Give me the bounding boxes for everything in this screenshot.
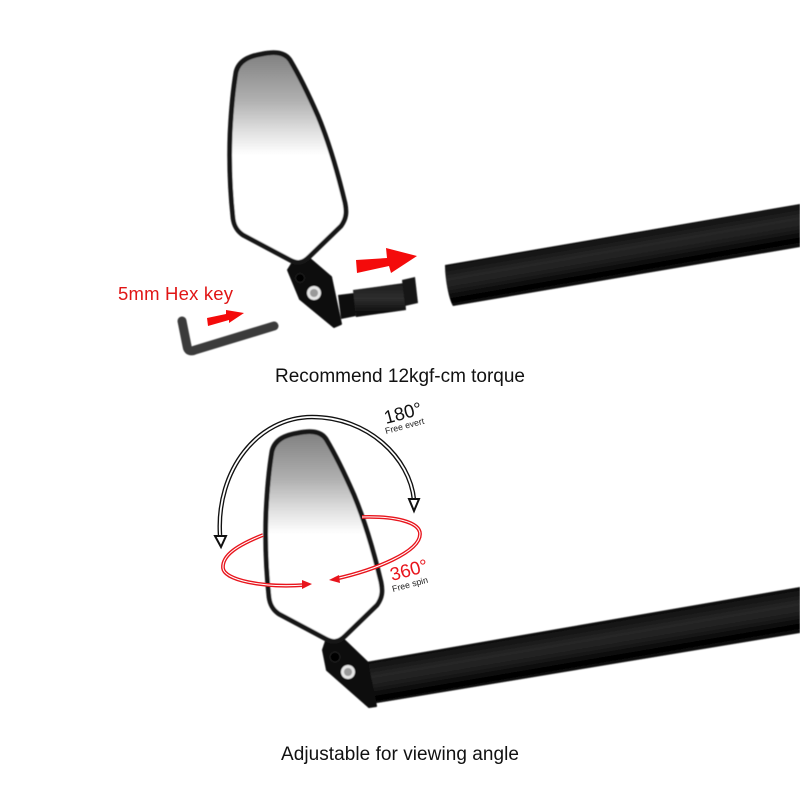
label: 360 degree: 360° xyxy=(388,555,430,585)
arrow: 180 degree evert xyxy=(215,417,419,547)
mirror assembly: bottom xyxy=(266,432,800,707)
caption: viewing angle: Adjustable for viewing angle xyxy=(281,744,519,765)
label: 180 degree: 180° xyxy=(382,398,424,428)
icon: hex key xyxy=(182,321,274,351)
label: Free spin: Free spin xyxy=(391,575,429,594)
expansion bar plug xyxy=(338,277,418,319)
mirror clamp: top xyxy=(288,259,341,327)
label: 5mm Hex key: 5mm Hex key xyxy=(118,283,234,304)
caption: torque: Recommend 12kgf-cm torque xyxy=(275,366,525,387)
mirror assembly: top xyxy=(230,53,418,327)
mirror head: bottom xyxy=(266,432,382,641)
mirror clamp: bottom xyxy=(323,639,376,707)
handlebar: top xyxy=(445,204,800,306)
label: Free evert: Free evert xyxy=(384,416,426,436)
handlebar: bottom xyxy=(360,587,800,705)
mirror head: top xyxy=(230,53,346,262)
arrow: insert into handlebar xyxy=(356,248,417,273)
arrow: hex key direction xyxy=(207,310,244,326)
arrow: 360 degree spin xyxy=(223,517,420,589)
